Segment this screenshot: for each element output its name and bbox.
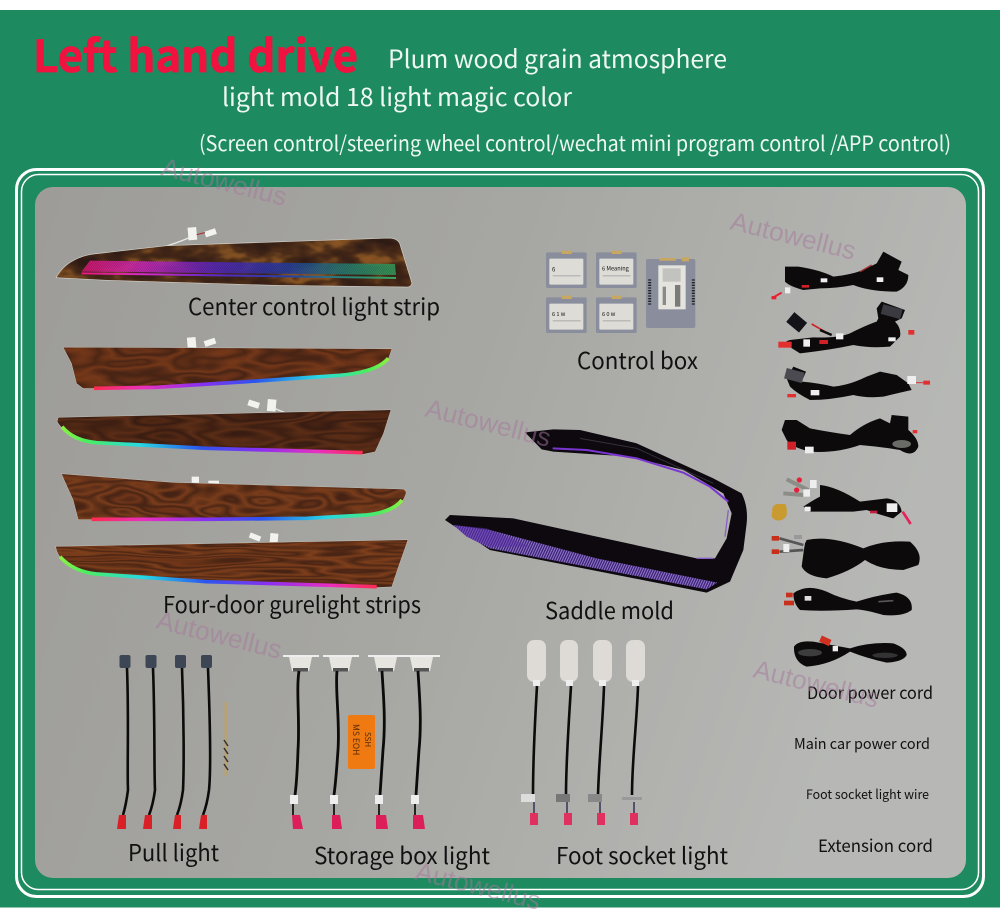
subtitle line 2: light mold 18 light magic color	[222, 78, 572, 114]
door light strip 2	[55, 399, 393, 457]
orange tape label: SSH	[362, 732, 373, 747]
harness 6	[772, 535, 920, 578]
subtitle line 1: Plum wood grain atmosphere	[388, 40, 727, 76]
label: center control light strip: Center control light strip	[188, 288, 440, 322]
module 1: 6	[552, 265, 556, 274]
orange tape label: MS EOH	[350, 724, 362, 755]
label: main car power cord: Main car power cord	[794, 733, 930, 754]
harness 7	[784, 588, 912, 615]
saddle mold trim	[445, 429, 747, 593]
module 3: 6 1 w	[552, 309, 566, 318]
harness 4	[782, 415, 918, 453]
watermark 1: Autowellus	[159, 152, 290, 212]
label: storage box light: Storage box light	[314, 837, 490, 871]
orange tape label	[348, 715, 375, 769]
door light strip 3	[58, 472, 408, 522]
module 4	[596, 296, 637, 333]
storage light 4	[404, 655, 440, 829]
wiring harnesses lower	[772, 477, 920, 667]
foot socket lights	[521, 640, 645, 825]
panel: gray product photo background	[35, 187, 966, 878]
label: saddle mold: Saddle mold	[545, 592, 674, 626]
pull light 3	[173, 655, 186, 829]
watermark 3: Autowellus	[423, 393, 554, 453]
harness 3	[784, 367, 930, 400]
control methods subtitle: (Screen control/steering wheel control/wechat mini program control /APP control)	[199, 128, 951, 158]
pull light 4	[199, 655, 212, 829]
label: door power cord: Door power cord	[807, 679, 933, 704]
module 3	[546, 296, 587, 333]
door light strip 4	[53, 532, 412, 590]
pull lights	[117, 655, 212, 829]
foot light 2	[556, 640, 578, 825]
harness 5	[772, 477, 911, 524]
foot light 1	[521, 640, 546, 825]
harness 8	[794, 636, 907, 667]
module 4: 6 0 w	[602, 309, 616, 318]
main control box	[646, 257, 695, 328]
label: foot socket light wire: Foot socket light wire	[806, 784, 929, 803]
label: extension cord: Extension cord	[818, 832, 933, 857]
label: foot socket light: Foot socket light	[556, 837, 728, 871]
storage light 3	[368, 655, 404, 829]
label: four-door strips: Four-door gurelight strips	[163, 586, 421, 620]
module 2: 6 Meaning	[602, 264, 630, 273]
label: pull light: Pull light	[128, 834, 219, 868]
foot light 3	[588, 640, 612, 825]
label: control box: Control box	[577, 342, 699, 376]
harness 1	[772, 252, 908, 299]
pull light 2	[143, 655, 156, 829]
harness 2	[778, 302, 914, 353]
outer white frame	[16, 170, 984, 896]
pull light 1	[117, 655, 130, 829]
storage box lights	[283, 655, 440, 829]
door light strip 1	[60, 337, 395, 392]
module 2	[596, 251, 637, 288]
wiring harnesses upper	[772, 252, 930, 453]
watermark 6: Autowellus	[413, 856, 544, 916]
watermark 4: Autowellus	[154, 605, 285, 665]
storage light 2	[323, 655, 359, 829]
foot light 4	[622, 640, 645, 825]
watermark 2: Autowellus	[728, 206, 859, 266]
control box modules	[546, 251, 695, 333]
storage light 1	[283, 655, 319, 829]
title: Left hand drive: Left hand drive	[33, 21, 358, 85]
center control light strip	[53, 227, 415, 290]
module 1	[546, 251, 587, 288]
icon: drill bit	[224, 702, 228, 776]
watermark 5: Autowellus	[751, 654, 882, 714]
